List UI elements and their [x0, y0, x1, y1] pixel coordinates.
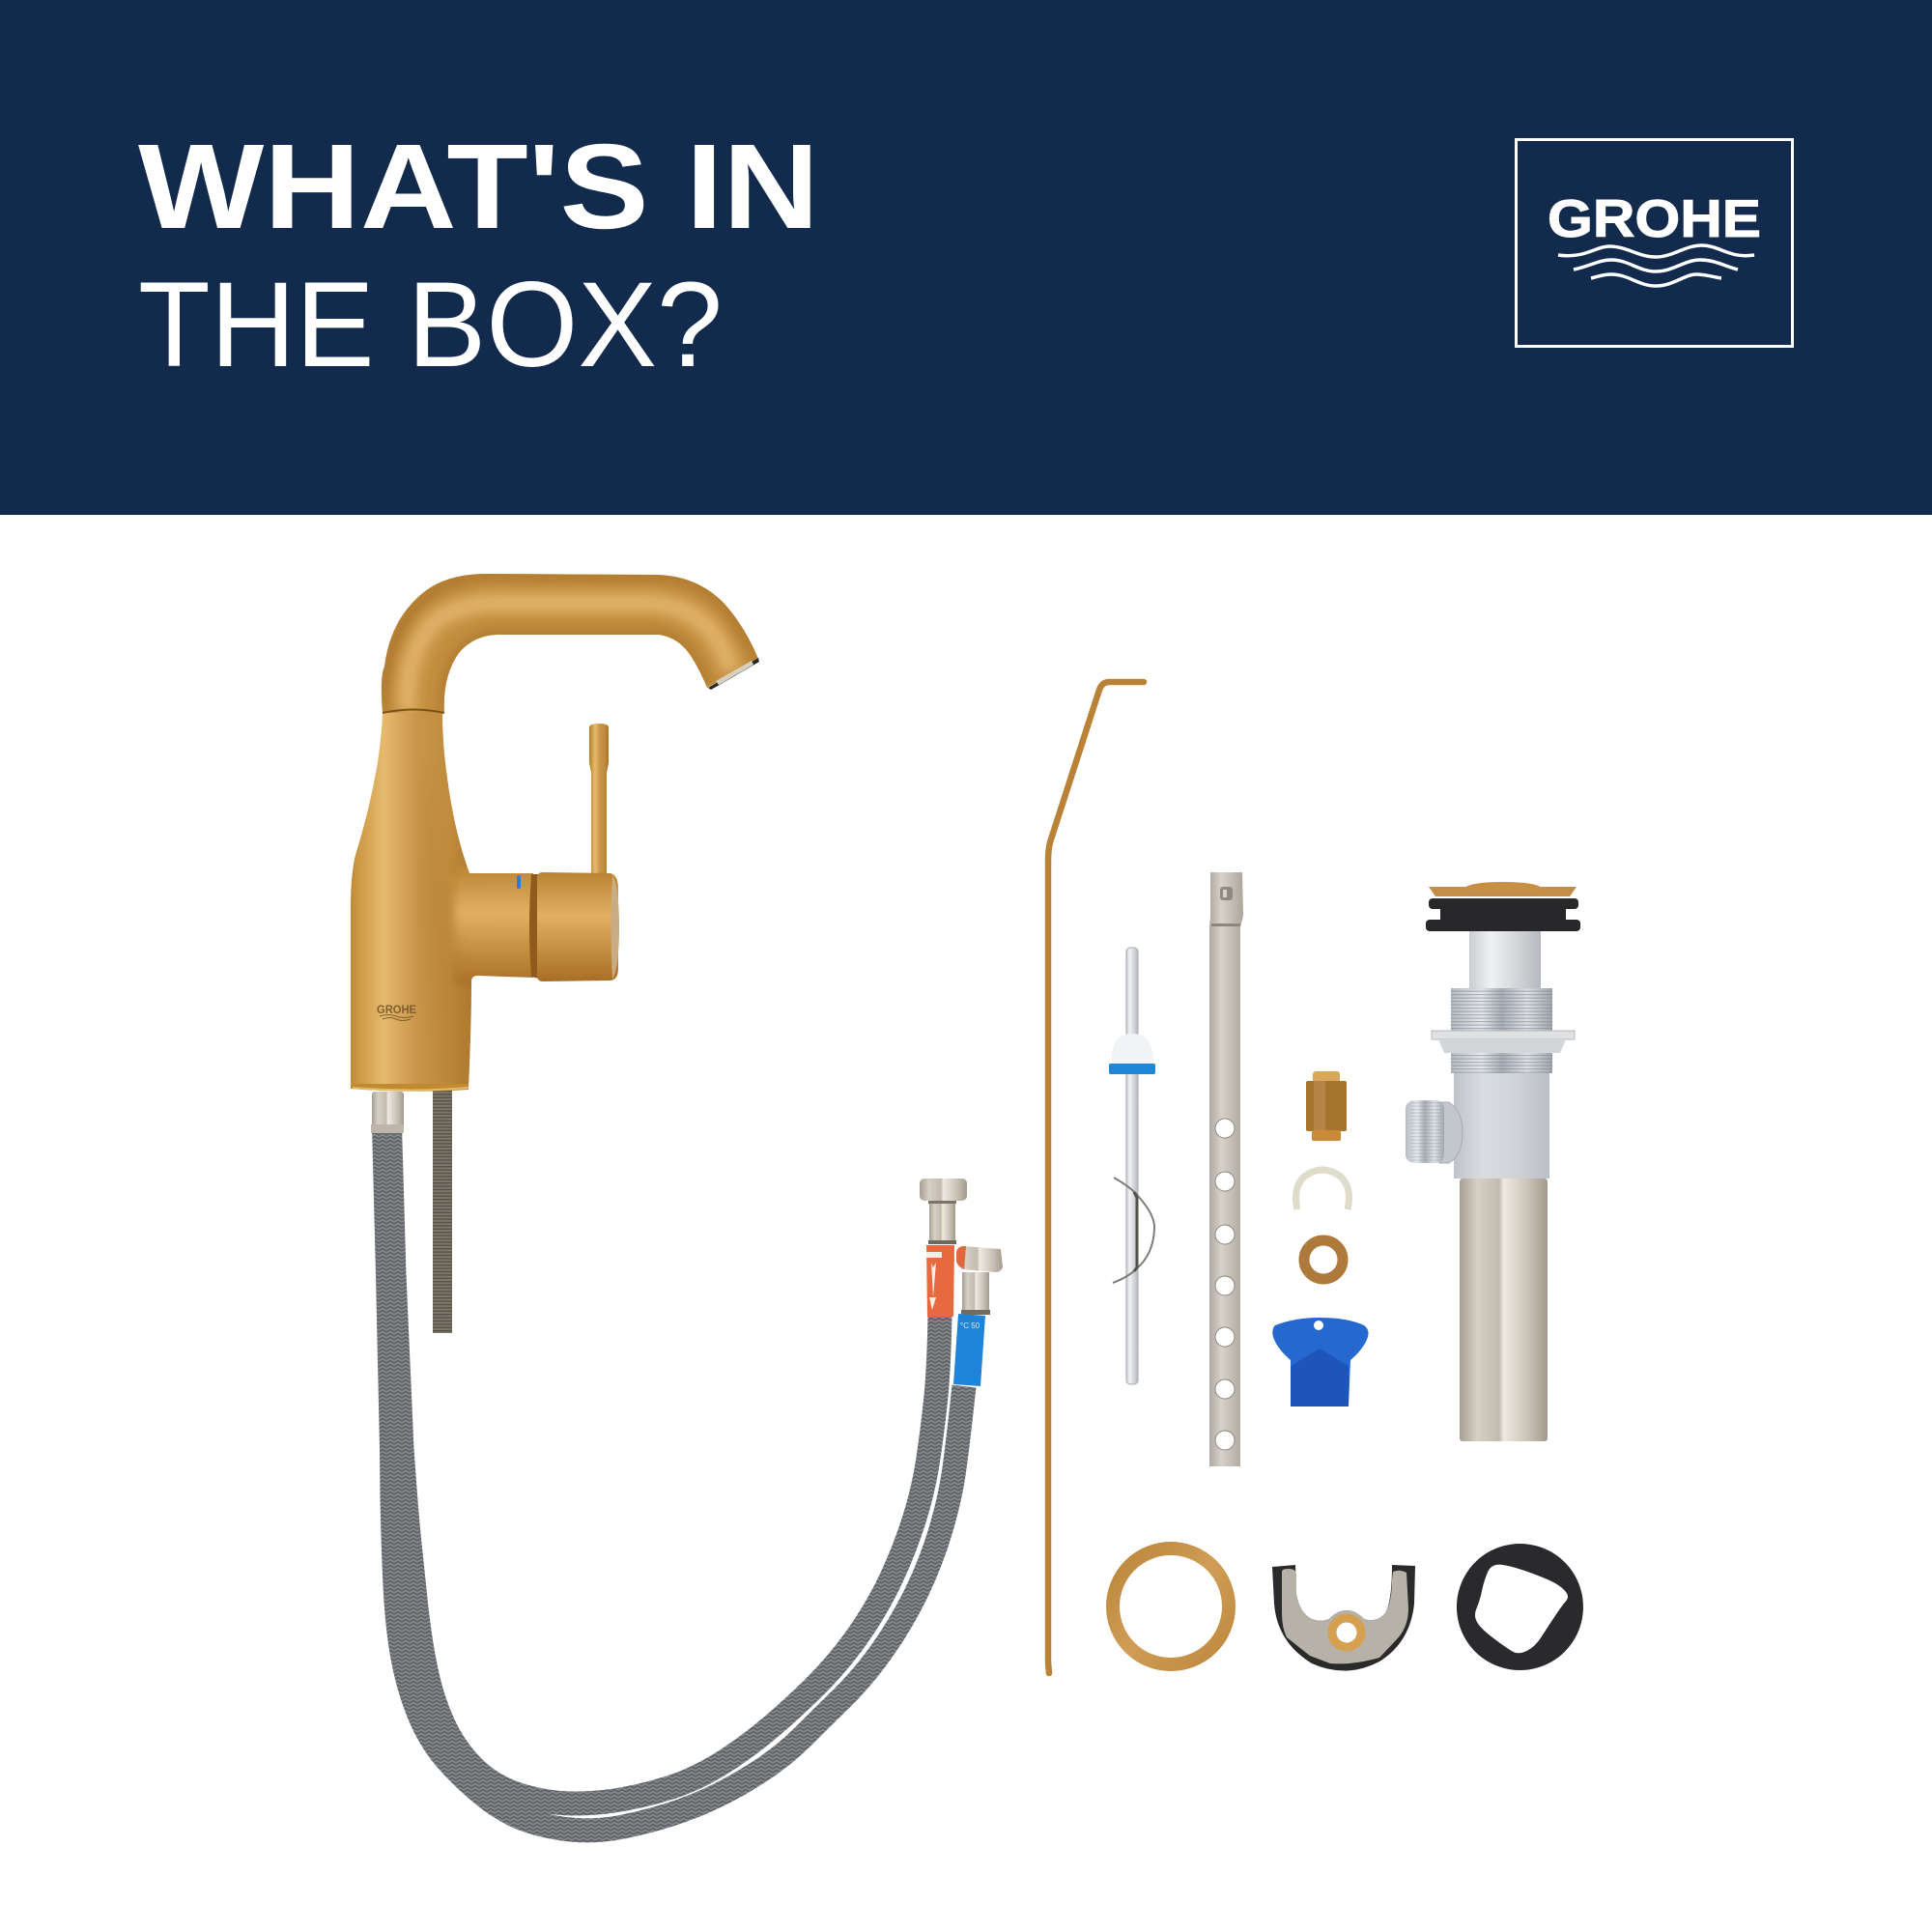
u bracket black: [1272, 1565, 1415, 1671]
body soft shadow: [469, 1002, 471, 1084]
hose ends: [920, 1179, 1003, 1386]
threaded mounting rod: [433, 1091, 452, 1333]
title line: what's in: WHAT'S IN: [138, 120, 819, 254]
drain tube: [1460, 1179, 1548, 1441]
drain body: [1454, 1073, 1549, 1179]
title line: the box: THE BOX?: [138, 258, 723, 392]
plastic clip: [1296, 1170, 1349, 1209]
strap holes: [1215, 1119, 1235, 1450]
spout inner shadow: [444, 635, 707, 713]
drain black seals: [1426, 898, 1580, 931]
handle gap: [529, 874, 539, 979]
drain stem: [1469, 931, 1541, 988]
logo: GROHE: [1517, 139, 1793, 346]
white dome: [1112, 1034, 1153, 1065]
temperature marker: [517, 875, 521, 889]
base strip: [351, 1084, 469, 1092]
lever: [589, 724, 609, 876]
pin rod with bead and clip: [1109, 948, 1155, 1384]
faucet hose ferrule: [371, 1092, 404, 1133]
spout outer shadow: [381, 574, 758, 713]
hose: inner red-marked: [390, 1125, 940, 1804]
hose: outer blue-marked: [384, 1125, 964, 1831]
blue fitting: °C 50: [960, 1321, 980, 1330]
aerator: [708, 658, 759, 690]
silver pin: [1126, 948, 1138, 1384]
spout highlight: [408, 603, 732, 713]
logo frame: [1517, 139, 1793, 346]
brass nut: [1306, 1071, 1347, 1141]
brass ring: [1113, 1548, 1229, 1664]
logo wordmark: GROHE: [1548, 188, 1761, 248]
black gasket: [1457, 1544, 1583, 1670]
spout: [377, 570, 763, 715]
strap screw: [1211, 887, 1240, 926]
pop-up drain: [1406, 882, 1580, 1441]
faucet body: [351, 713, 533, 1086]
perforated strap: [1209, 872, 1243, 1466]
blue band: [1109, 1064, 1155, 1074]
spring clip: [1113, 1178, 1154, 1283]
header band: [0, 0, 1932, 515]
collar line: [383, 709, 444, 713]
faucet logo: GROHE: [377, 1003, 416, 1016]
u bracket silver: [1282, 1569, 1408, 1663]
drain side knob: [1406, 1100, 1463, 1163]
drain threads: [1451, 988, 1552, 1073]
title: [138, 120, 819, 392]
blue aerator key: [1272, 1318, 1368, 1406]
drain flange: [1432, 1031, 1575, 1053]
bronze washer: [1304, 1240, 1343, 1279]
blue fitting: [953, 1246, 1003, 1386]
hoses: [371, 1091, 964, 1831]
u bracket gold bushing: [1332, 1618, 1361, 1647]
long gold lift rod: [1048, 682, 1144, 1673]
faucet: [343, 570, 763, 1101]
u bracket: [1272, 1565, 1415, 1671]
faucet arm: [454, 865, 541, 985]
handle cylinder: [537, 872, 619, 981]
drain copper cap: [1429, 882, 1577, 896]
logo waves: [1558, 245, 1754, 286]
red fitting: [920, 1179, 967, 1317]
